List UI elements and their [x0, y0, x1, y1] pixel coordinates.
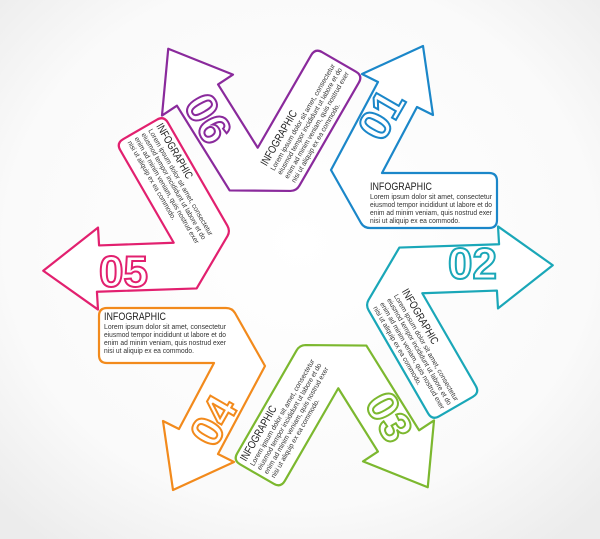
- module 05: [6, 116, 247, 350]
- text 04: Lorem ipsum dolor sit amet, consectetur: [104, 324, 227, 331]
- text 05: Lorem ipsum dolor sit amet, consectetur: [146, 128, 214, 238]
- text 01: enim ad minim veniam, quis nostrud exer: [370, 210, 493, 217]
- text 02: enim ad minim veniam, quis nostrud exer: [378, 301, 446, 411]
- text 06: enim ad minim veniam, quis nostrud exer: [284, 70, 351, 180]
- number 01: 01: [349, 82, 415, 148]
- text 03: INFOGRAPHIC: [238, 404, 280, 464]
- text 06: INFOGRAPHIC: [259, 108, 300, 168]
- text 06: eiusmod tempor incididunt ut labore et do: [277, 67, 344, 176]
- text 06: nisi ut aliquip ex ea commodo.: [291, 103, 342, 184]
- text 04: nisi ut aliquip ex ea commodo.: [104, 348, 194, 355]
- module 02: [349, 186, 590, 420]
- text 01: INFOGRAPHIC: [370, 181, 432, 193]
- text 02: nisi ut aliquip ex ea commodo.: [371, 305, 422, 387]
- module 01: [331, 46, 497, 228]
- number 04: 04: [181, 387, 248, 454]
- text 01: Lorem ipsum dolor sit amet, consectetur: [370, 194, 493, 201]
- number 05: 05: [99, 247, 148, 296]
- text 02: [371, 287, 471, 415]
- text 05: INFOGRAPHIC: [153, 121, 195, 181]
- text 05: nisi ut aliquip ex ea commodo.: [126, 140, 177, 221]
- text 04: eiusmod tempor incididunt ut labore et do: [104, 332, 226, 339]
- text 01: nisi ut aliquip ex ea commodo.: [370, 218, 460, 225]
- text 02: INFOGRAPHIC: [399, 287, 440, 347]
- module 06: [122, 0, 363, 219]
- text 01: [370, 181, 493, 225]
- number 06: 06: [174, 85, 241, 152]
- text 04: [104, 311, 227, 355]
- text 04: enim ad minim veniam, quis nostrud exer: [104, 340, 227, 347]
- text 03: Lorem ipsum dolor sit amet, consectetur: [249, 358, 317, 468]
- text 06: Lorem ipsum dolor sit amet, consectetur: [270, 62, 337, 172]
- text 05: [126, 121, 225, 250]
- text 03: nisi ut aliquip ex ea commodo.: [270, 398, 321, 480]
- text 03: [238, 351, 338, 480]
- text 02: Lorem ipsum dolor sit amet, consectetur: [392, 293, 459, 403]
- number 02: 02: [448, 240, 497, 289]
- text 02: eiusmod tempor incididunt ut labore et do: [385, 297, 452, 407]
- text 06: [259, 56, 358, 184]
- text 05: eiusmod tempor incididunt ut labore et do: [140, 132, 207, 241]
- text 05: enim ad minim veniam, quis nostrud exer: [133, 136, 200, 246]
- number 03: 03: [355, 384, 422, 451]
- text 01: eiusmod tempor incididunt ut labore et do: [370, 202, 492, 209]
- text 03: enim ad minim veniam, quis nostrud exer: [263, 366, 331, 476]
- text 03: eiusmod tempor incididunt ut labore et do: [256, 362, 324, 472]
- module 03: [233, 317, 474, 539]
- module 04: [99, 308, 265, 490]
- text 04: INFOGRAPHIC: [104, 311, 166, 323]
